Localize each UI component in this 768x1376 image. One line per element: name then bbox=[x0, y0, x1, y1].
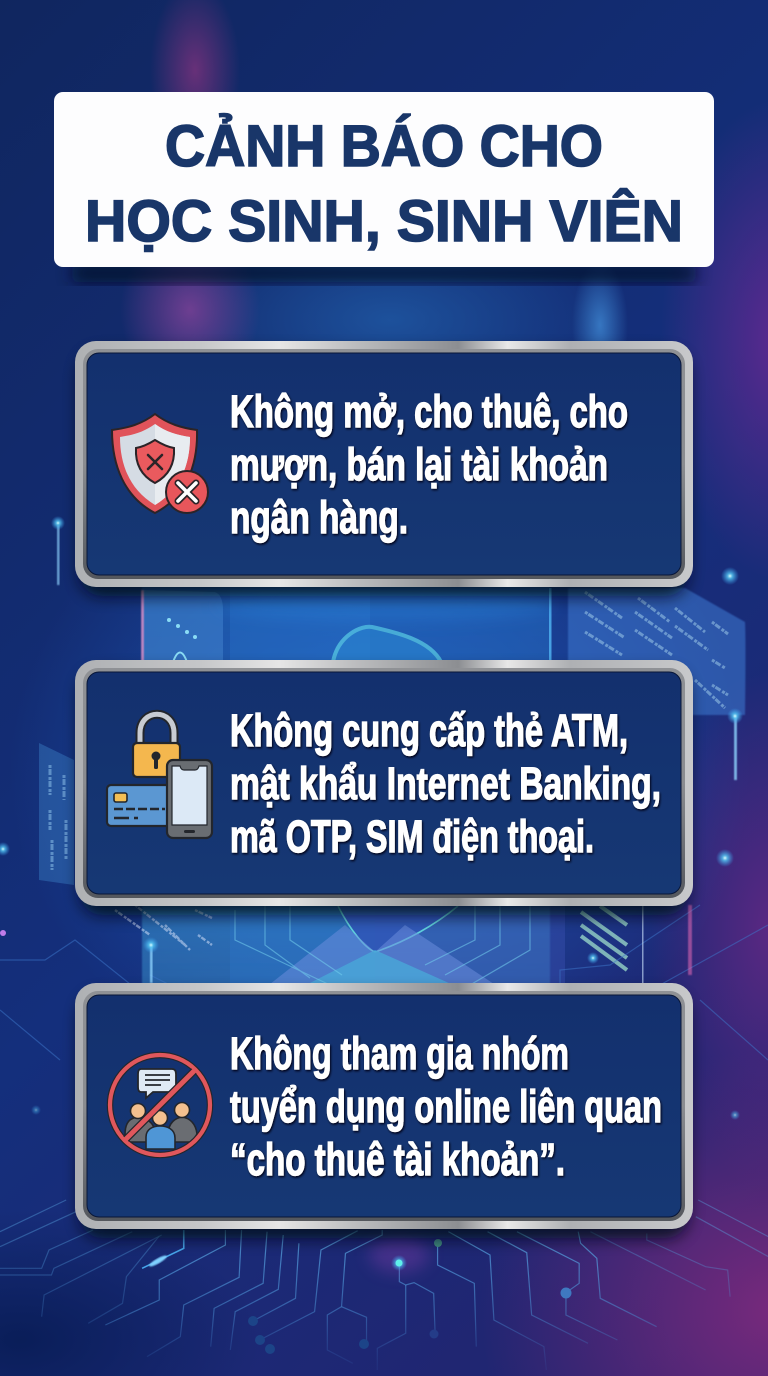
text: card 2 bbox=[230, 705, 661, 862]
panel: card 3 bbox=[75, 983, 693, 1238]
text: card 1: Không mở, cho thuê, cho bbox=[230, 386, 628, 437]
icon: shield with x bbox=[112, 414, 208, 513]
text: card 2: Không cung cấp thẻ ATM, bbox=[230, 705, 628, 756]
title line 2: HỌC SINH, SINH VIÊN bbox=[85, 189, 683, 254]
icon: no recruitment group bbox=[110, 1055, 210, 1155]
panel: card 1 bbox=[75, 341, 693, 596]
circuit lines bbox=[0, 1200, 768, 1370]
title box bbox=[54, 92, 714, 282]
text: card 1 bbox=[230, 386, 628, 543]
text: card 3 bbox=[230, 1028, 662, 1185]
background glow dots bbox=[0, 516, 743, 1120]
icon: padlock, bank card and phone bbox=[107, 714, 212, 838]
text: card 2: mã OTP, SIM điện thoại. bbox=[230, 811, 594, 862]
panel: card 2 bbox=[75, 660, 693, 915]
text: card 3: Không tham gia nhóm bbox=[230, 1028, 569, 1079]
text: card 3: “cho thuê tài khoản”. bbox=[230, 1134, 565, 1185]
background tech panels and shield bbox=[0, 586, 768, 1060]
text: card 1: ngân hàng. bbox=[230, 492, 408, 543]
text: card 1: mượn, bán lại tài khoản bbox=[230, 439, 608, 490]
title line 1: CẢNH BÁO CHO bbox=[165, 114, 603, 179]
circuit nodes bbox=[148, 1237, 572, 1354]
